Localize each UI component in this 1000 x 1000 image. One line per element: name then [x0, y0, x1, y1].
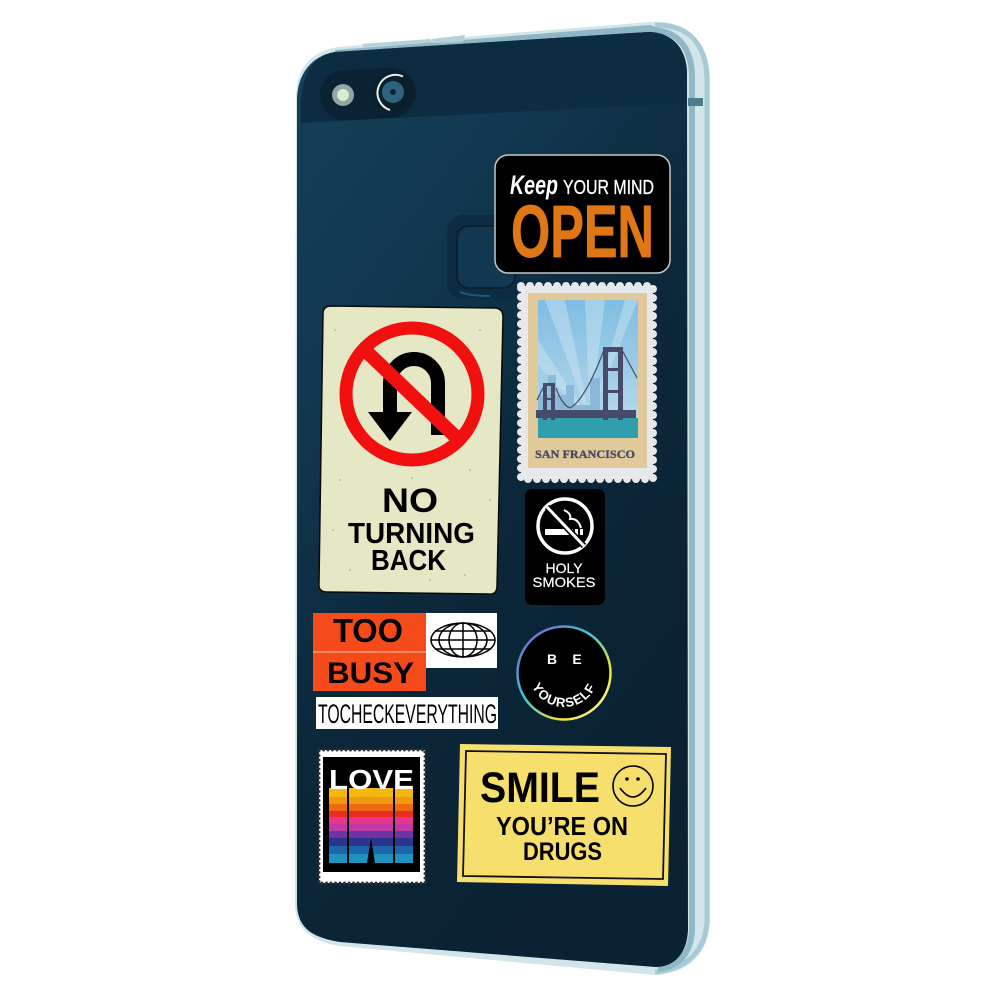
- sticker: keep your mind open: YOUR MIND: [563, 177, 654, 199]
- top edge: [335, 25, 672, 54]
- rim notch: [688, 98, 703, 106]
- right rim outer: [655, 25, 707, 972]
- skyline: [538, 375, 600, 425]
- sticker: no turning back: [319, 306, 503, 594]
- sticker: be yourself: [516, 625, 612, 721]
- sticker: smile: DRUGS: [523, 838, 602, 866]
- sticker: too busy: [313, 612, 498, 729]
- sticker: no turning back: NO: [382, 482, 438, 520]
- water: [538, 418, 638, 438]
- sticker: no turning back: BACK: [371, 545, 446, 577]
- sticker: too busy: BUSY: [327, 657, 414, 690]
- sticker: san francisco stamp: [521, 286, 653, 479]
- phone: [295, 22, 710, 975]
- paper specks: [332, 329, 491, 581]
- fingerprint sensor: [447, 215, 520, 299]
- sticker: holy smokes: HOLY: [545, 560, 583, 576]
- smiley: [613, 766, 653, 806]
- rainbow stripes: [325, 788, 417, 863]
- lens: [372, 71, 414, 113]
- globe icon: [431, 623, 495, 657]
- top band: [301, 32, 687, 123]
- sticker: too busy: TOO: [333, 612, 403, 649]
- no smoking icon: [538, 499, 592, 553]
- sticker: smile: [457, 744, 671, 886]
- sticker: be yourself: YOURSELF: [534, 682, 593, 708]
- buttons on top edge: [362, 35, 465, 47]
- golden gate bridge: [536, 347, 637, 420]
- phone case: [295, 22, 710, 975]
- sticker: too busy: TOCHECKEVERYTHING: [318, 699, 497, 729]
- u-turn arrow: [368, 359, 438, 441]
- sticker: be yourself: B: [547, 651, 557, 667]
- sticker: holy smokes: SMOKES: [532, 574, 596, 590]
- sticker: be yourself: E: [572, 651, 582, 667]
- sticker: love stamp: LOVE: [329, 764, 414, 795]
- sticker: san francisco stamp: SAN FRANCISCO: [535, 449, 635, 461]
- flash: [332, 84, 354, 106]
- prohibition ring: [346, 328, 478, 460]
- sun rays: [538, 300, 638, 405]
- back panel: [297, 32, 688, 967]
- sticker: smile: YOU’RE ON: [496, 811, 628, 841]
- sticker: love stamp: [319, 750, 425, 883]
- sticker: keep your mind open: [495, 155, 670, 273]
- sticker: smile: SMILE: [480, 764, 600, 812]
- right rim inner: [650, 30, 692, 969]
- sticker: no turning back: TURNING: [348, 518, 475, 550]
- sticker: keep your mind open: Keep: [510, 170, 558, 200]
- sticker: keep your mind open: OPEN: [511, 190, 654, 273]
- sticker: holy smokes: [525, 489, 605, 605]
- camera housing: [319, 67, 417, 121]
